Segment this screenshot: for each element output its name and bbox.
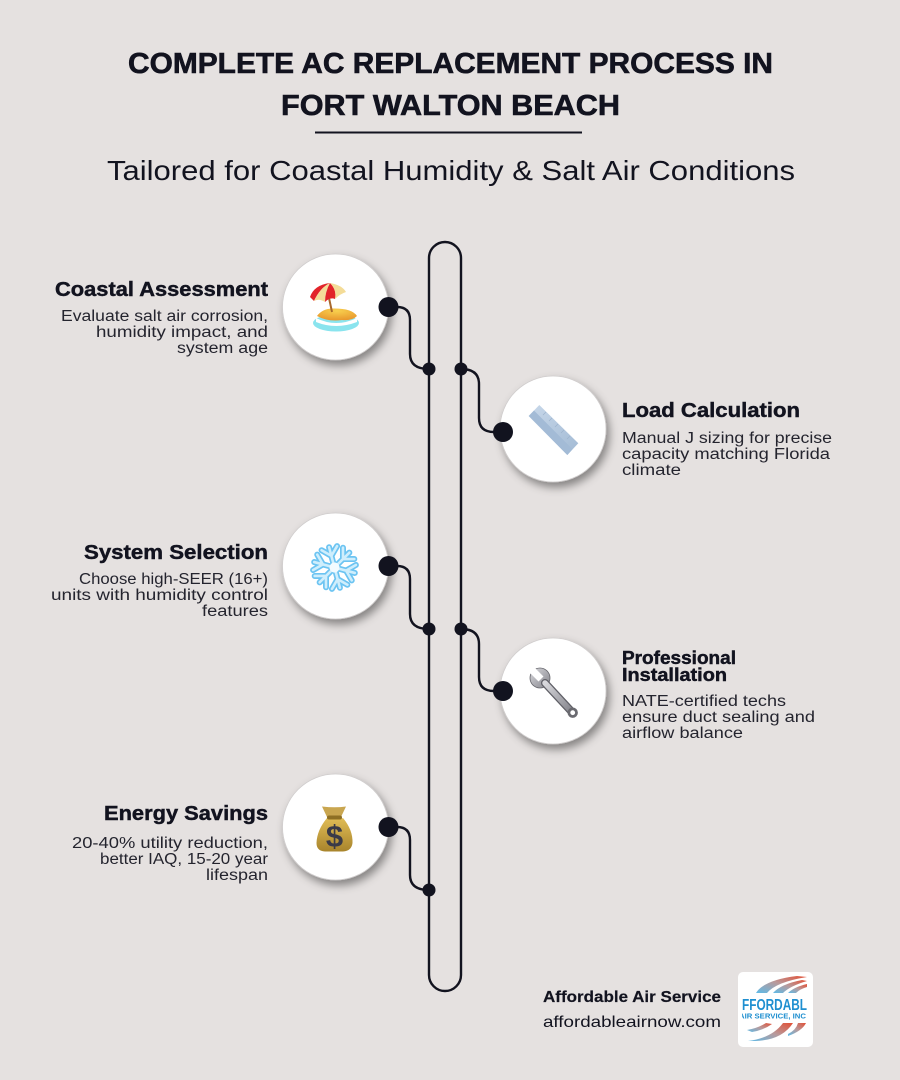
step 3 connector [388,566,429,629]
step 5 text: lifespan [206,867,268,884]
step 1 text: humidity impact, and [96,324,268,341]
step 4 text: ensure duct sealing and [622,709,815,726]
step 3 circle [282,513,388,619]
step 5 text: better IAQ, 15-20 year [100,851,268,868]
step 2: load calculation [454,362,832,482]
title: COMPLETE AC REPLACEMENT PROCESS IN [128,48,773,80]
step 2 circle [500,376,606,482]
step 3 text: features [202,603,268,620]
step 3 text [51,542,268,620]
step 5 text: Energy Savings [104,803,268,825]
step 1 text: system age [177,340,268,357]
step 4 text [622,648,815,742]
step 4 text: Professional [622,648,736,668]
step 1 node [378,297,398,317]
step 1 text: Coastal Assessment [55,279,268,301]
logo: FFORDABL [742,997,807,1014]
icon: ruler [529,405,578,455]
step 1 text [55,279,268,357]
icon: wrench [529,667,578,718]
footer company text: affordableairnow.com [543,1014,721,1031]
icon: money bag: $ [326,818,343,854]
step 5 text [72,803,268,884]
title: FORT WALTON BEACH [281,90,620,122]
step 5: energy savings [72,774,436,896]
step 1 text: Evaluate salt air corrosion, [61,308,268,325]
step 2 text: Manual J sizing for precise [622,430,832,447]
step 4 text: NATE-certified techs [622,693,786,710]
icon: money bag [316,806,353,854]
step 2 node [493,422,513,442]
title [128,48,773,122]
step 3: system selection [51,513,436,636]
step 3 text: System Selection [84,542,268,564]
step 4 node [493,681,513,701]
step 5 connector [388,827,429,890]
step 4 text: Installation [622,665,727,685]
step 4 text: airflow balance [622,725,743,742]
step 4 circle [500,638,606,744]
step 4: professional installation [454,622,815,744]
step 2 text: capacity matching Florida [622,446,830,463]
step 4 connector [461,629,503,691]
step 5 node [378,817,398,837]
step 1 connector [388,307,429,369]
subtitle: Tailored for Coastal Humidity & Salt Air Conditions [107,155,795,186]
logo: AIR SERVICE, INC [739,1012,807,1020]
step 2 text [622,400,832,479]
step 3 text: units with humidity control [51,587,268,604]
step 2 text: Load Calculation [622,400,800,422]
logo [738,972,813,1047]
step 1 circle [282,254,388,360]
central timeline track [429,242,461,991]
step 3 text: Choose high-SEER (16+) [79,571,268,588]
icon: snowflake [308,541,361,594]
step 2 text: climate [622,462,681,479]
footer company text [543,989,721,1031]
step 5 text: 20-40% utility reduction, [72,835,268,852]
footer company text: Affordable Air Service [543,989,721,1006]
step 5 circle [282,774,388,880]
icon: beach umbrella on island [310,283,359,332]
step 3 node [378,556,398,576]
step 2 connector [461,369,503,432]
step 1: coastal assessment [55,254,436,376]
